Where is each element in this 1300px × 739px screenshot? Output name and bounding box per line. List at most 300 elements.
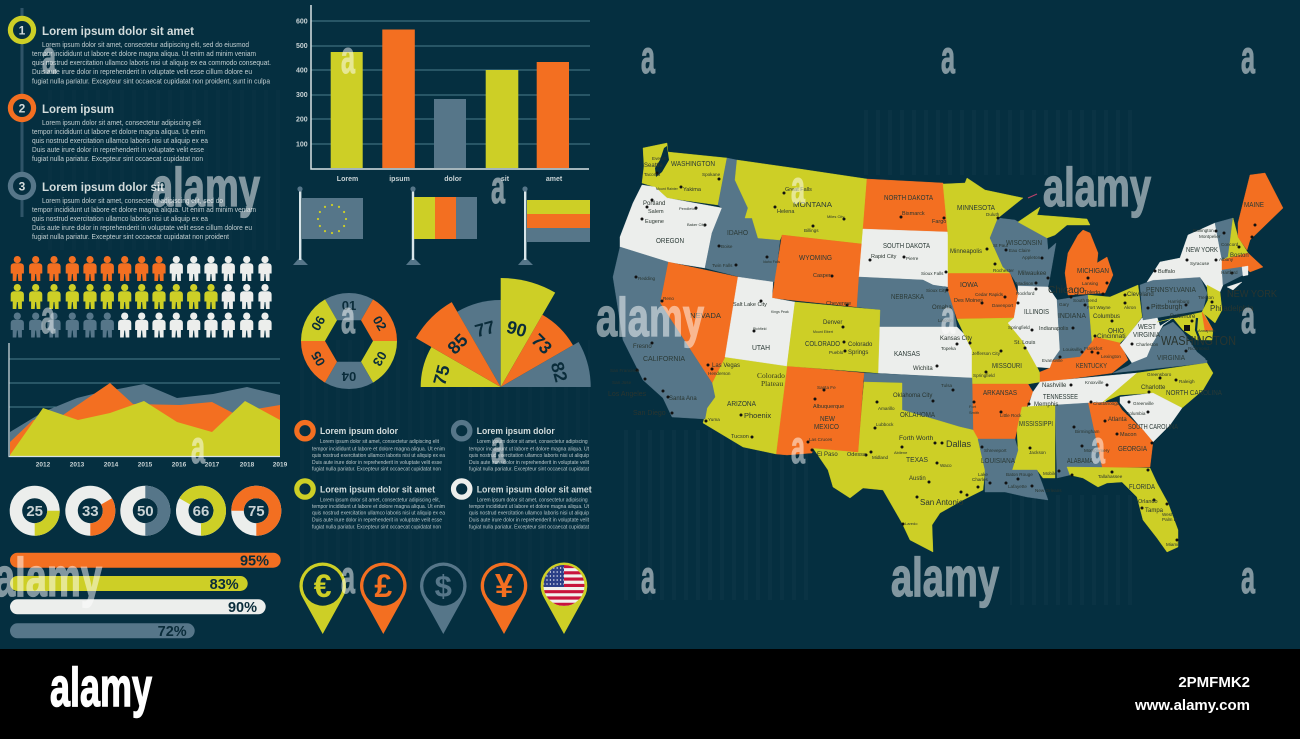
- map: state labels: MISSOURI: [992, 363, 1022, 370]
- state: Ohio: [1088, 285, 1142, 343]
- map: city labels, small: Eau Claire: [1009, 248, 1031, 253]
- bar chart y-axis labels: [296, 18, 308, 148]
- fan chart values: [429, 317, 571, 387]
- map: city labels, medium: Toledo: [1084, 290, 1100, 296]
- donut 75: 75: [248, 503, 265, 520]
- map: city labels, small: Idaho Falls: [763, 260, 780, 264]
- watermark: small a marks: a: [491, 161, 505, 213]
- area chart year labels: 2019: [273, 462, 288, 468]
- map: state labels: FLORIDA: [1129, 484, 1155, 491]
- map: city labels, medium: Pittsburgh: [1151, 304, 1183, 311]
- map: city labels, small: Concord: [1221, 242, 1239, 247]
- map: city labels, small: Redding: [638, 276, 656, 281]
- area chart year labels: [36, 462, 288, 468]
- state: New York: [1147, 223, 1223, 292]
- legend block: slate: Lorem ipsum dolor: [477, 426, 555, 437]
- legend block: white: Duis aute irure dolor in reprehenderit in voluptate velit: [469, 517, 590, 523]
- map: city labels, small: Midland: [872, 455, 889, 460]
- progress bar 83%: 83%: [210, 577, 239, 593]
- state: South Dakota: [859, 229, 950, 287]
- fan chart values: 73: [528, 330, 556, 358]
- map: city labels, small: Reno: [663, 296, 674, 301]
- map: state labels: MINNESOTA: [957, 205, 995, 212]
- map: city labels, small: Trenton: [1198, 295, 1214, 300]
- map: city labels, small: West: [1162, 512, 1173, 517]
- list item 2: Lorem ipsum: [42, 102, 114, 116]
- watermark: small a marks: a: [641, 31, 655, 83]
- state: Pennsylvania: [1140, 277, 1207, 320]
- map: city labels, small: Jefferson City: [972, 351, 1001, 356]
- map: city labels, medium: El Paso: [817, 452, 838, 458]
- state: Wyoming: [772, 235, 862, 307]
- map: city labels, small: Richfield: [753, 327, 766, 331]
- people pictogram rows: [11, 256, 272, 338]
- ring chart segment numbers: 05: [308, 349, 328, 369]
- donut 66: [182, 492, 220, 529]
- watermark: small a marks: a: [1241, 291, 1255, 343]
- map: state labels: ILLINOIS: [1024, 309, 1049, 316]
- progress bars: [10, 553, 281, 640]
- map: city labels, small: Mount Rainier: [656, 187, 679, 191]
- map: city labels, medium: Orlando: [1138, 499, 1158, 505]
- legend block: white: Lorem ipsum dolor sit amet: [477, 484, 592, 496]
- bar chart x-axis labels: [337, 176, 563, 183]
- legend block: white: fugiat nulla pariatur. Excepteur sint occaecat cupidatat: [469, 525, 590, 531]
- map: city markers: [636, 173, 1255, 540]
- fan chart values: 90: [504, 317, 529, 341]
- map: city labels, small: Santa Fe: [817, 385, 836, 390]
- map: city labels, small: Lincoln: [938, 318, 953, 323]
- list item 1: tempor incididunt ut labore et dolore magna aliqua. Ut enim ad minim veniam: [32, 49, 256, 58]
- map: city labels, medium: Austin: [909, 476, 926, 482]
- bar chart x-axis labels: ipsum: [389, 176, 410, 183]
- donut percentage charts: [16, 492, 275, 529]
- state: Colorado: [787, 302, 880, 373]
- map: city labels, small: Everett: [652, 156, 667, 161]
- map: city labels, medium: Nashville: [1042, 383, 1067, 389]
- map: city labels, medium: Baltimore: [1170, 314, 1196, 320]
- legend block: white: tempor incididunt ut labore et dolore magna aliqua. Ut: [469, 504, 590, 510]
- donut 25: 25: [26, 503, 43, 520]
- map: city labels, small: Lexington: [1101, 354, 1121, 359]
- state: Minnesota: [943, 178, 1023, 273]
- map: city labels, small: Laredo: [905, 521, 918, 526]
- map: city labels, small: Kings Peak: [771, 310, 789, 314]
- map: state labels: MISSISSIPPI: [1019, 421, 1053, 428]
- list item 2: Lorem ipsum dolor sit amet, consectetur adipiscing elit: [42, 118, 201, 127]
- map: city labels, small: Akron: [1124, 305, 1136, 310]
- map: state labels: INDIANA: [1058, 313, 1086, 320]
- state: New Hampshire: [1222, 218, 1248, 260]
- area chart year labels: 2015: [138, 462, 153, 468]
- map: city labels, medium: Columbus: [1093, 314, 1120, 320]
- list item 1: fugiat nulla pariatur. Excepteur sint occaecat cupidatat non proident, sunt in culpa: [32, 76, 271, 86]
- map: state labels: NEVADA: [690, 313, 721, 320]
- map: city labels, medium: Tampa: [1145, 508, 1164, 514]
- map: state labels: COLORADO: [805, 341, 840, 348]
- list item 1: quis nostrud exercitation ullamco laboris nisi ut aliquip ex ea commodo consequat.: [32, 58, 271, 67]
- map: city labels, medium: Boston: [1230, 253, 1249, 259]
- map: state labels: MAINE: [1244, 202, 1264, 209]
- map: state labels: KENTUCKY: [1076, 363, 1107, 370]
- map: city labels, medium: Wichita: [913, 366, 933, 372]
- footer image id and site: [1134, 674, 1250, 714]
- map: city labels, small: San Francisco: [610, 368, 640, 373]
- map: city labels, small: Lubbock: [876, 422, 894, 427]
- Great Lakes accent: [1028, 194, 1037, 198]
- map: major city labels: Philadelphia: [1210, 304, 1254, 313]
- watermark: small a marks: a: [791, 421, 805, 473]
- footer strip: [0, 649, 1300, 739]
- watermark stamps: [0, 31, 1255, 608]
- legend block: lime: Lorem ipsum dolor sit amet, consectetur adipiscing elit,: [320, 498, 440, 504]
- legend block: white: [454, 481, 592, 531]
- map: state labels: ALABAMA: [1067, 458, 1093, 465]
- map: city labels, small: Sioux City: [926, 288, 947, 293]
- bar chart: [296, 5, 590, 183]
- map: city labels, small: Las Cruces: [809, 437, 833, 442]
- watermark: small a marks: a: [341, 31, 355, 83]
- map: city labels, medium: Milwaukee: [1018, 271, 1047, 277]
- legend block: orange: [297, 422, 445, 472]
- map: city labels, small: Fort Wayne: [1087, 305, 1111, 310]
- map: state labels: VIRGINIA: [1133, 332, 1160, 339]
- map: city labels, small: Springfield: [1008, 325, 1030, 330]
- map: city labels, medium: Fargo: [932, 219, 946, 225]
- list item 1: [8, 16, 271, 85]
- map: city labels, small: Smith: [969, 410, 979, 415]
- map: state labels: IDAHO: [727, 230, 749, 237]
- map: city labels, small: Davenport: [992, 303, 1014, 308]
- icon: dollar map pin: [420, 563, 467, 634]
- donut 50: [127, 492, 164, 529]
- map: city labels, small: Topeka: [941, 346, 956, 351]
- map: major city labels: Chicago: [1048, 285, 1085, 296]
- map: city labels, small: Montpelier: [1199, 234, 1221, 239]
- fan chart values: 85: [444, 330, 472, 358]
- legend block: slate: [454, 422, 590, 472]
- bar chart x-axis labels: sit: [501, 176, 510, 183]
- state: Massachusetts: [1222, 253, 1263, 272]
- map: city labels, medium: Buffalo: [1158, 269, 1175, 275]
- numbered text list: [8, 8, 271, 241]
- bar chart y-axis labels: 100: [296, 142, 308, 148]
- semicircle fan chart: [416, 278, 591, 387]
- watermark: small a marks: a: [1241, 31, 1255, 83]
- map: state labels: NEW: [820, 416, 835, 423]
- map: city labels, medium: Atlanta: [1108, 417, 1127, 423]
- map: city labels, small: Hartford: [1221, 270, 1238, 275]
- map: city labels, small: [610, 156, 1239, 547]
- state: Virginia: [1113, 322, 1207, 373]
- icon: yen map pin: ¥: [495, 567, 514, 604]
- map: state labels: ARKANSAS: [983, 390, 1017, 397]
- bar chart y-axis labels: 200: [296, 116, 308, 124]
- map: city labels, medium: St. Louis: [1014, 340, 1036, 346]
- map: city labels, medium: Seattle: [644, 163, 663, 169]
- list item 3: Duis aute irure dolor in reprehenderit in voluptate velit esse cillum dolore eu: [32, 223, 252, 232]
- ring chart segment numbers: 03: [370, 349, 390, 369]
- map: city labels, medium: Helena: [777, 209, 795, 215]
- map: city labels, medium: Eugene: [645, 219, 664, 225]
- state: Nebraska: [857, 277, 957, 327]
- state: Maryland: [1157, 312, 1213, 340]
- area chart year labels: 2013: [70, 462, 85, 468]
- progress bar 72%: [10, 623, 195, 640]
- fan chart values: 77: [473, 317, 497, 341]
- map: city labels, small: Chattanooga: [1093, 401, 1120, 406]
- state: New Mexico: [776, 366, 864, 455]
- map: state labels: PENNSYLVANIA: [1146, 287, 1196, 294]
- map: city labels, small: Miles City: [827, 214, 844, 219]
- legend block: lime: [297, 481, 445, 531]
- bar chart y-axis labels: 300: [296, 92, 308, 99]
- map: state labels: OKLAHOMA: [900, 412, 935, 419]
- map: state labels: SOUTH DAKOTA: [883, 243, 930, 250]
- state: Arkansas: [972, 384, 1033, 439]
- area chart year labels: 2017: [205, 462, 220, 468]
- map: major city labels: WASHINGTON: [1161, 333, 1236, 348]
- map: city labels, medium: [633, 163, 1249, 514]
- map: city labels, medium: Forth Worth: [899, 435, 934, 442]
- list item 3: 3: [19, 180, 26, 194]
- watermark: alamy large: [0, 156, 1151, 608]
- watermark: small a marks: a: [491, 421, 505, 473]
- map: city labels, small: Madison: [1016, 281, 1034, 286]
- map: major city labels: San Antonio: [920, 498, 964, 507]
- donut 33: 33: [82, 503, 99, 520]
- watermark: small a marks: a: [1241, 551, 1255, 603]
- state: Georgia: [1088, 402, 1153, 468]
- state: Michigan lower peninsula: [1065, 230, 1113, 295]
- footer image id and site: 2PMFMK2: [1178, 674, 1250, 691]
- legend block: orange: Lorem ipsum dolor: [320, 426, 398, 437]
- people row: orange 9 of 15: [11, 256, 272, 281]
- state: Nevada: [660, 262, 738, 383]
- watermark: small a marks: a: [941, 31, 955, 83]
- state: Vermont: [1215, 218, 1233, 260]
- list item 3: tempor incididunt ut labore et dolore magna aliqua. Ut enim ad minim veniam: [32, 205, 256, 214]
- map: state labels: [643, 161, 1264, 491]
- map: major city labels: [608, 285, 1277, 507]
- map: state labels: MEXICO: [814, 424, 839, 431]
- list item 1: 1: [19, 24, 26, 38]
- flag: horizontal tricolour: [518, 186, 590, 265]
- donut 66: 66: [193, 503, 209, 520]
- map: city labels, small: Baker City: [687, 222, 705, 227]
- legend block: lime: Lorem ipsum dolor sit amet: [320, 484, 436, 496]
- map: city labels, small: Twin Falls: [712, 263, 733, 268]
- map: state labels: MONTANA: [793, 202, 832, 209]
- map: city labels, medium: Salem: [648, 209, 664, 215]
- legend block: slate: fugiat nulla pariatur. Excepteur sint occaecat cupidatat: [469, 466, 590, 472]
- map: city labels, medium: Rapid City: [871, 254, 897, 260]
- state: Alabama: [1055, 403, 1102, 478]
- area chart year labels: 2016: [172, 462, 187, 468]
- state: Rhode Island: [1242, 266, 1248, 276]
- map: city labels, medium: Albuquerque: [813, 404, 844, 410]
- map: state labels: NORTH CAROLINA: [1166, 390, 1222, 397]
- state: Washington: [642, 143, 727, 205]
- map: city labels, small: Jackson: [1029, 450, 1046, 455]
- state: Michigan upper peninsula: [1018, 207, 1090, 238]
- state: Mississippi: [1012, 405, 1055, 478]
- map: city labels, small: Syracuse: [1190, 261, 1210, 266]
- watermark: alamy large: alamy: [152, 156, 260, 218]
- footer logo: alamy: [50, 656, 152, 718]
- list item 3: Lorem ipsum dolor sit amet, consectetur adipiscing elit, sed do: [42, 196, 223, 205]
- state: North Dakota: [863, 179, 948, 232]
- list item 2: Duis aute irure dolor in reprehenderit in voluptate velit esse: [32, 145, 204, 154]
- state: Montana: [735, 160, 867, 244]
- map: city labels, medium: Cleveland: [1127, 292, 1154, 298]
- state: Florida: [1067, 467, 1178, 552]
- ring chart segment numbers: 06: [308, 313, 328, 333]
- map: city labels, medium: Memphis: [1034, 402, 1058, 408]
- map: city labels, medium: Las Vegas: [712, 363, 740, 369]
- map: state labels: WEST: [1138, 324, 1157, 331]
- bar chart x-axis labels: amet: [546, 176, 563, 183]
- list item 1: Duis aute irure dolor in reprehenderit in voluptate velit esse cillum dolore eu: [32, 67, 252, 76]
- bar chart y-axis labels: 600: [296, 18, 308, 26]
- map: state labels: NEBRASKA: [891, 294, 924, 301]
- list item 2: tempor incididunt ut labore et dolore magna aliqua. Ut enim: [32, 127, 205, 136]
- list item 1: Lorem ipsum dolor sit amet: [42, 24, 194, 38]
- state: Wisconsin: [990, 218, 1056, 287]
- donut 75: [238, 492, 275, 529]
- map: city labels, medium: Omaha: [932, 305, 952, 311]
- map: city labels, medium: Tucson: [731, 434, 749, 440]
- people row: lime 12 of 15: [11, 284, 272, 309]
- map: city labels, small: Lake: [978, 472, 988, 477]
- map: city labels, small: Miami: [1166, 542, 1178, 547]
- bar chart y-axis labels: 500: [296, 43, 308, 50]
- map: city labels, medium: Bismarck: [902, 211, 925, 217]
- map: city labels, medium: Portland: [643, 201, 665, 207]
- fan chart values: 82: [547, 360, 571, 384]
- state: North Carolina: [1103, 363, 1213, 408]
- list item 2: quis nostrud exercitation ullamco laboris nisi ut aliquip ex ea: [32, 136, 209, 145]
- map: state labels: OHIO: [1108, 328, 1124, 335]
- watermark: small a marks: a: [791, 161, 805, 213]
- map: city labels, small: Mount Elbert: [813, 330, 833, 334]
- map: city labels, medium: Colorado: [848, 342, 873, 348]
- map: state labels: WISCONSIN: [1006, 240, 1042, 247]
- state: Delaware: [1202, 312, 1213, 331]
- state: South Carolina: [1120, 393, 1182, 442]
- state: Kansas: [878, 327, 972, 378]
- map: city labels, small: Little Rock: [1000, 413, 1022, 418]
- map: major city labels: Los Angeles: [608, 391, 647, 398]
- icon: yen map pin: [481, 563, 527, 634]
- state: Louisiana: [978, 439, 1048, 500]
- map: state labels: CALIFORNIA: [643, 356, 685, 363]
- state: Oklahoma: [864, 373, 973, 430]
- state: Idaho: [705, 158, 780, 282]
- fan chart values: 75: [429, 363, 454, 387]
- map: city labels, medium: Indianapolis: [1039, 326, 1069, 332]
- map: state shapes: [613, 143, 1283, 552]
- map: city labels, small: Knoxville: [1085, 380, 1104, 385]
- icon: euro map pin: [299, 563, 346, 634]
- bar chart x-axis labels: Lorem: [337, 176, 358, 183]
- state: Maine: [1238, 173, 1283, 250]
- list item 2: [8, 94, 209, 163]
- people row: slate 6 of 15: [11, 312, 272, 338]
- map: city labels, medium: Santa Ana: [669, 396, 697, 402]
- map: city labels, small: Birmingham: [1075, 429, 1100, 434]
- map: major city labels: San Diego: [633, 410, 666, 417]
- map: city labels, medium: Oklahoma City: [893, 393, 932, 399]
- map: state labels: TEXAS: [906, 457, 928, 464]
- map: city labels, small: Palm B: [1162, 517, 1177, 522]
- map: city labels, small: New Orleans: [1035, 488, 1062, 493]
- flag: EU: [293, 186, 363, 265]
- progress bar 90%: 90%: [228, 600, 257, 616]
- map: city labels, small: Rochester: [993, 268, 1014, 273]
- map: city labels, small: Louisville: [1063, 347, 1082, 352]
- map: city labels, small: Baton Rouge: [1006, 472, 1033, 477]
- map: Colorado Plateau label: [757, 371, 785, 388]
- ring chart segment numbers: 02: [370, 313, 390, 333]
- icon: US flag map pin: [541, 563, 587, 634]
- watermark: small a marks: a: [1091, 421, 1105, 473]
- map: city labels, small: Yuma: [708, 417, 720, 422]
- map: city labels, small: Frankfort: [1084, 346, 1103, 351]
- progress bar 90%: [10, 599, 266, 616]
- map: city labels, small: Rockford: [1016, 291, 1035, 296]
- USA map: [608, 143, 1283, 552]
- legend block: lime: tempor incididunt ut labore et dolore magna aliqua. Ut enim: [312, 504, 445, 510]
- list item 3: quis nostrud exercitation ullamco laboris nisi ut aliquip ex ea: [32, 214, 209, 223]
- bars: [331, 30, 569, 168]
- map: city labels, small: Pendleton: [679, 206, 697, 211]
- watermark: alamy large: alamy: [1043, 156, 1151, 218]
- map: city labels, small: Greensboro: [1147, 372, 1172, 377]
- map: city labels, small: Amarillo: [878, 406, 895, 411]
- map: state labels: WYOMING: [799, 255, 832, 262]
- state: Tennessee: [1028, 373, 1137, 407]
- watermark: small a marks: a: [341, 551, 355, 603]
- watermark: small a marks: a: [191, 421, 205, 473]
- list item 3: fugiat nulla pariatur. Excepteur sint occaecat cupidatat non proident: [32, 232, 229, 241]
- map: city labels, small: Waco: [940, 463, 952, 468]
- progress bar 95%: [10, 553, 281, 570]
- map: city labels, medium: Cincinnati: [1097, 333, 1126, 340]
- legend block: slate: Duis aute irure dolor in reprehenderit in voluptate velit: [469, 460, 590, 466]
- legend block: orange: Lorem ipsum dolor sit amet, consectetur adipiscing elit: [320, 439, 440, 445]
- map: Colorado Plateau label: Colorado: [757, 371, 785, 380]
- list item 3: Lorem ipsum dolor sit: [42, 180, 164, 194]
- map: city labels, medium: Minneapolis: [950, 249, 982, 255]
- legend block: white: Lorem ipsum dolor sit amet, consectetur adipiscing: [477, 498, 588, 504]
- map: city labels, small: Charles: [972, 477, 989, 482]
- footer image id and site: www.alamy.com: [1134, 697, 1250, 714]
- map: city labels, medium: Salt Lake City: [733, 302, 767, 308]
- list item 1: Lorem ipsum dolor sit amet, consectetur adipiscing elit, sed do eiusmod: [42, 40, 249, 49]
- state: West Virginia: [1120, 317, 1173, 363]
- state: New Jersey: [1202, 285, 1222, 323]
- map: city labels, small: Mobile: [1043, 471, 1057, 476]
- map: city labels, medium: Kansas City: [940, 336, 972, 342]
- legend block: orange: Duis aute irure dolor in reprehenderit in voluptate velit esse: [312, 460, 442, 466]
- bar chart x-axis labels: dolor: [444, 176, 462, 183]
- map: city labels, medium: Great Falls: [785, 187, 812, 193]
- watermark: small a marks: a: [941, 291, 955, 343]
- map: city labels, small: Appleton: [1022, 255, 1041, 260]
- map: city labels, small: Burlington: [1193, 228, 1214, 233]
- map: city labels, small: Tacoma: [644, 172, 661, 177]
